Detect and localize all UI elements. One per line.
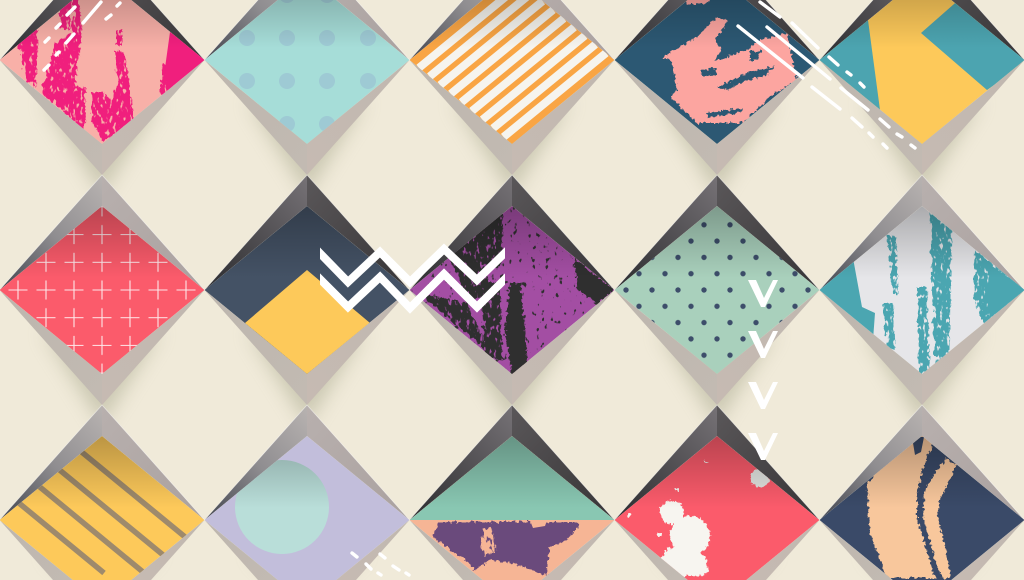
panel: row 1 diamond 1, pink and magenta brush <box>0 0 210 175</box>
white chevrons <box>748 280 778 460</box>
white dashed diagonals, top left <box>44 2 120 70</box>
panel: row 2 diamond 1, coral with white plus signs <box>0 175 206 405</box>
artwork: green triangle and purple brush <box>410 436 614 580</box>
artwork: aqua with muted dots <box>204 0 410 144</box>
artwork: colour blocks <box>819 0 1024 144</box>
panel: row 1 diamond 4, navy with salmon brush <box>614 0 820 175</box>
panel: row 3 diamond 3, green triangle over peach and purple <box>410 405 614 580</box>
artwork: white paint splatter <box>614 436 820 580</box>
panel: row 2 diamond 3, purple with black grunge <box>410 175 614 405</box>
artwork: magenta brush strokes <box>0 0 210 144</box>
panel: row 1 diamond 2, aqua polka dots <box>204 0 410 175</box>
panel: row 3 diamond 5, navy with peach brush <box>820 405 1024 580</box>
artwork: diagonal stripes <box>410 0 614 144</box>
artwork: yellow diamond on slate <box>204 206 410 374</box>
white zigzag lines <box>312 245 513 308</box>
panel: row 2 diamond 5, pale grey with teal brush <box>815 175 1024 405</box>
artwork: purple grunge texture <box>410 206 614 378</box>
white dashed diagonals, top right <box>738 2 915 148</box>
artwork: brown diagonal stripes <box>0 436 204 580</box>
soft shadows under wells <box>42 100 982 580</box>
panel: row 3 diamond 1, yellow with brown stripes <box>0 405 204 580</box>
panel: row 3 diamond 4, coral with white splatter <box>614 405 820 580</box>
artwork: peach brush arc <box>820 430 1024 580</box>
panel: row 2 diamond 4, mint with navy dots <box>613 175 821 405</box>
artwork: teal brush streaks <box>815 206 1024 374</box>
panel: row 1 diamond 5, yellow and teal blocks <box>819 0 1024 175</box>
panel: row 3 diamond 2, lavender with aqua circle <box>204 405 410 580</box>
panel: row 1 diamond 3, orange and white stripes <box>410 0 614 175</box>
white dashed diagonals, bottom centre <box>352 553 409 575</box>
artwork: staggered dot grid <box>613 206 821 374</box>
artwork: plus sign grid <box>0 204 206 376</box>
panel: row 2 diamond 2, slate with yellow diamond <box>204 175 410 405</box>
artwork: salmon brush shape <box>614 0 820 144</box>
artwork: circle on lavender <box>204 436 410 580</box>
